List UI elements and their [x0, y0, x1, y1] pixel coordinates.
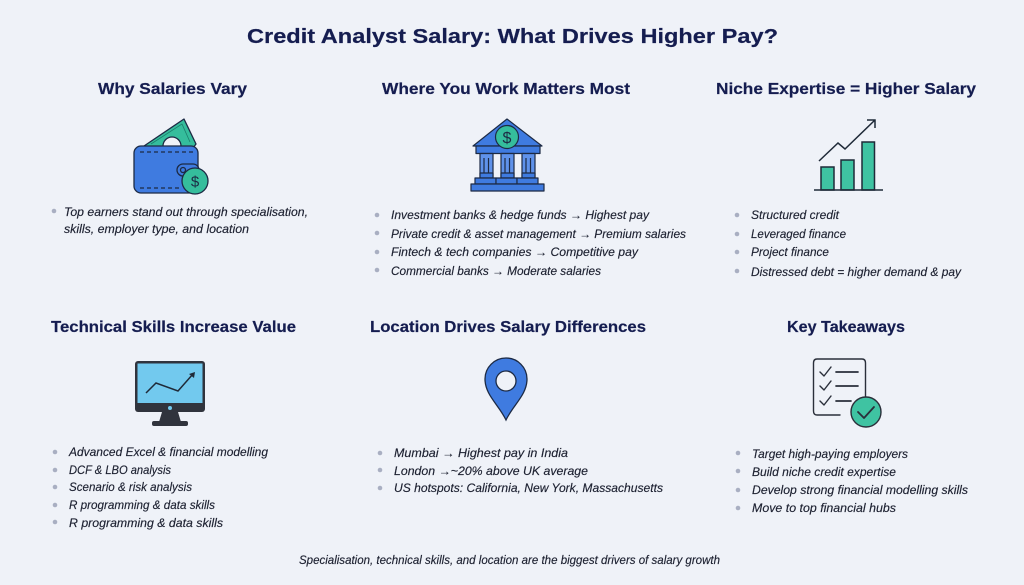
icon: map pin — [485, 358, 527, 420]
bullet list: locations: US hotspots: California, New York, Massachusetts — [394, 482, 663, 495]
bullet list: niches: Distressed debt = higher demand & pay — [751, 266, 962, 279]
bullet list: technical skills — [53, 446, 269, 530]
bullet list: locations: London →~20% above UK average — [394, 465, 589, 478]
text block: why salaries vary: skills, employer type, and location — [64, 223, 249, 236]
heading: why salaries vary: Why Salaries Vary — [98, 81, 247, 98]
bullet list: employers: Fintech & tech companies → Competitive pay — [391, 246, 639, 259]
heading: key takeaways: Key Takeaways — [787, 319, 905, 336]
bullet list: employers — [375, 209, 686, 278]
heading: niche expertise: Niche Expertise = Higher Salary — [716, 81, 976, 98]
bullet list: niches: Structured credit — [751, 209, 840, 222]
bullet list: takeaways: Target high-paying employers — [752, 448, 908, 461]
bullet list: employers: Private credit & asset management → Premium salaries — [391, 228, 686, 241]
icon: rising bar chart — [814, 120, 883, 190]
icon: bank building — [471, 119, 544, 191]
panel: location — [370, 319, 663, 495]
bullet list: takeaways: Develop strong financial modelling skills — [752, 484, 968, 497]
bullet list: takeaways — [736, 448, 968, 515]
footer note: Specialisation, technical skills, and location are the biggest drivers of salary growth — [299, 554, 720, 567]
text block: why salaries vary — [52, 206, 308, 236]
bullet list: locations — [378, 447, 663, 495]
text block: why salaries vary: Top earners stand out through specialisation, — [64, 206, 308, 219]
bullet list: technical skills: R programming & data skills — [69, 499, 215, 512]
icon: monitor with line chart — [135, 361, 205, 426]
bullet list: employers: Investment banks & hedge funds → Highest pay — [391, 209, 650, 222]
bullet list: niches — [735, 209, 962, 279]
icon: wallet with cash: $ — [191, 174, 200, 190]
bullet list: locations: Mumbai → Highest pay in India — [394, 447, 569, 460]
bullet list: takeaways: Build niche credit expertise — [752, 466, 897, 479]
bullet list: takeaways: Move to top financial hubs — [752, 502, 896, 515]
bullet list: niches: Project finance — [751, 246, 830, 259]
icon: bank building: $ — [503, 130, 512, 147]
panel: niche expertise — [716, 81, 976, 279]
heading: location: Location Drives Salary Differences — [370, 319, 646, 336]
bullet list: technical skills: R programming & data skills — [69, 517, 223, 530]
panel: technical skills — [51, 319, 296, 530]
bullet list: niches: Leveraged finance — [751, 228, 847, 241]
bullet list: employers: Commercial banks → Moderate salaries — [391, 265, 601, 278]
panel: where you work matters most — [375, 81, 686, 278]
panel: key takeaways — [736, 319, 968, 515]
panel: why salaries vary — [52, 81, 308, 236]
icon: wallet with cash — [134, 119, 208, 194]
bullet list: technical skills: DCF & LBO analysis — [69, 464, 171, 477]
icon: checklist with badge — [814, 359, 881, 427]
heading: where you work: Where You Work Matters Most — [382, 81, 630, 98]
bullet list: technical skills: Scenario & risk analysis — [69, 481, 192, 494]
title: Credit Analyst Salary: What Drives Higher Pay? — [247, 25, 778, 48]
bullet list: technical skills: Advanced Excel & financial modelling — [68, 446, 269, 459]
heading: technical skills: Technical Skills Increase Value — [51, 319, 296, 336]
